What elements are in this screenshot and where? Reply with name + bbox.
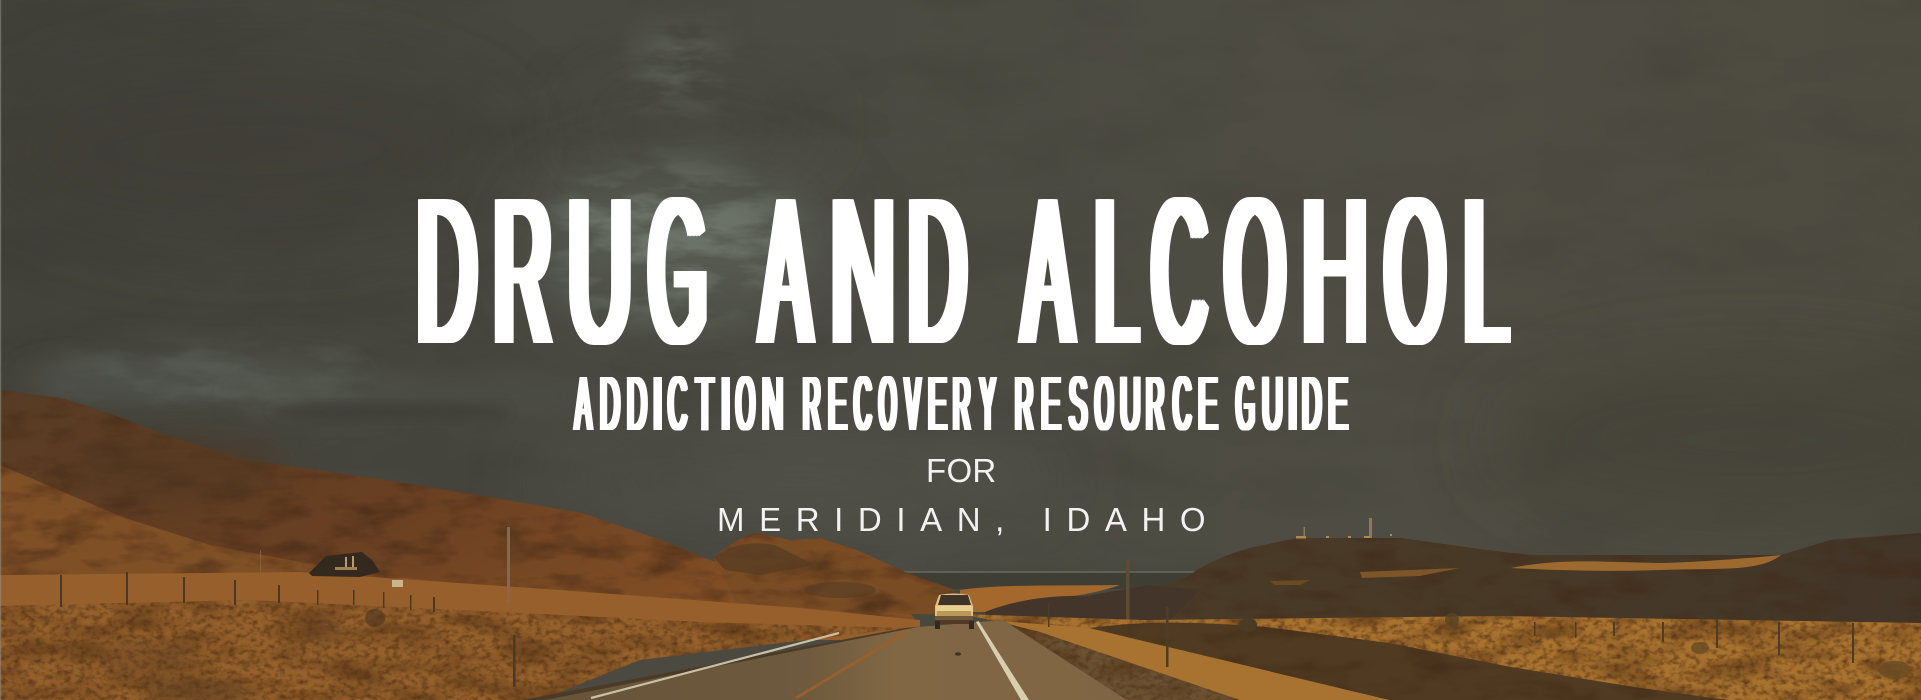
subtitle: R: [1146, 361, 1165, 447]
title: L: [1464, 155, 1508, 388]
subtitle: C: [854, 361, 872, 447]
utility poles: [260, 527, 1130, 622]
title: U: [568, 155, 632, 388]
subtitle: C: [668, 361, 687, 447]
subtitle: U: [1120, 361, 1140, 447]
title: A: [761, 155, 810, 388]
subtitle: Y: [980, 361, 996, 447]
road: [522, 620, 1127, 700]
subtitle: E: [1328, 361, 1348, 447]
text: location: MERIDIAN, IDAHO: [717, 501, 1220, 538]
title: O: [1225, 155, 1285, 388]
subtitle: A: [575, 361, 592, 447]
left hills: [0, 390, 960, 640]
subtitle: G: [1236, 361, 1255, 447]
title: G: [649, 155, 707, 388]
subtitle: D: [627, 361, 647, 447]
subtitle: S: [1069, 361, 1087, 447]
subtitle: C: [1173, 361, 1192, 447]
subtitle: E: [1041, 361, 1061, 447]
subtitle: E: [928, 361, 947, 447]
subtitle: O: [1095, 361, 1113, 447]
text: FOR: FOR: [926, 452, 997, 489]
title: D: [417, 155, 477, 388]
title: L: [1095, 155, 1138, 388]
roadside house: [309, 552, 403, 587]
distant right hill and horizon: [900, 533, 1921, 640]
title: O: [1385, 155, 1445, 388]
subtitle: R: [803, 361, 821, 447]
field, shoulder and grass right of road: [960, 613, 1921, 700]
subtitle: D: [1302, 361, 1321, 447]
title: A: [1023, 155, 1072, 388]
title: H: [1302, 155, 1368, 388]
subtitle: I: [720, 361, 731, 447]
subtitle: O: [879, 361, 897, 447]
radio towers on the hilltop: [1296, 518, 1392, 538]
fence posts and marker right: [1048, 603, 1854, 667]
subtitle: T: [696, 361, 714, 447]
subtitle: I: [652, 361, 664, 447]
subtitle: V: [905, 361, 921, 447]
foreground grass left: [0, 600, 905, 700]
title: C: [1152, 155, 1206, 388]
left edge highlight: [0, 0, 1, 700]
title: R: [494, 155, 551, 388]
subtitle: N: [762, 361, 783, 447]
subtitle: I: [1286, 361, 1298, 447]
subtitle: E: [828, 361, 847, 447]
title: [417, 155, 1511, 388]
subtitle: R: [953, 361, 971, 447]
road edge line right: [976, 621, 1029, 700]
fence posts left: [60, 572, 516, 687]
subtitle: D: [600, 361, 620, 447]
subtitle: O: [736, 361, 755, 447]
subtitle: [572, 361, 1349, 447]
road edge line left: [591, 633, 839, 698]
title: N: [831, 155, 895, 388]
subtitle: E: [1198, 361, 1218, 447]
subtitle: R: [1015, 361, 1034, 447]
road centre line: [796, 632, 906, 698]
title: D: [908, 155, 967, 388]
pickup truck: [935, 594, 974, 629]
subtitle: U: [1262, 361, 1282, 447]
